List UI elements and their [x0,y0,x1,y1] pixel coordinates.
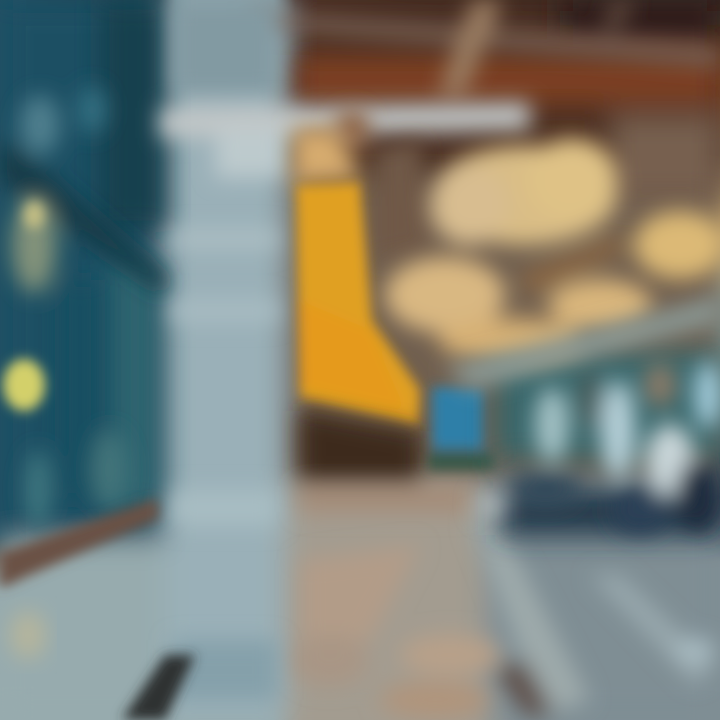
pale ledge under sacks [445,296,720,390]
background band behind people [495,350,720,535]
floor reflections [292,515,715,718]
beige sacks [385,138,720,362]
dark floor object bottom [122,655,195,720]
dark base beneath banner [300,410,470,512]
racking details [0,86,165,530]
left teal racking [100,0,165,510]
ceiling beams [250,0,720,95]
hanging bracket [334,108,430,260]
ceiling [295,0,720,200]
yellow lamp glow [3,201,45,411]
yellow-orange banner [296,182,420,426]
central pale column highlights [172,0,278,700]
pale crossbar [160,102,530,178]
blue sign [428,387,494,470]
lower left floor glow [10,611,46,659]
orange upper glow [292,128,362,185]
brown rail [0,498,160,588]
standing figures [476,361,720,534]
